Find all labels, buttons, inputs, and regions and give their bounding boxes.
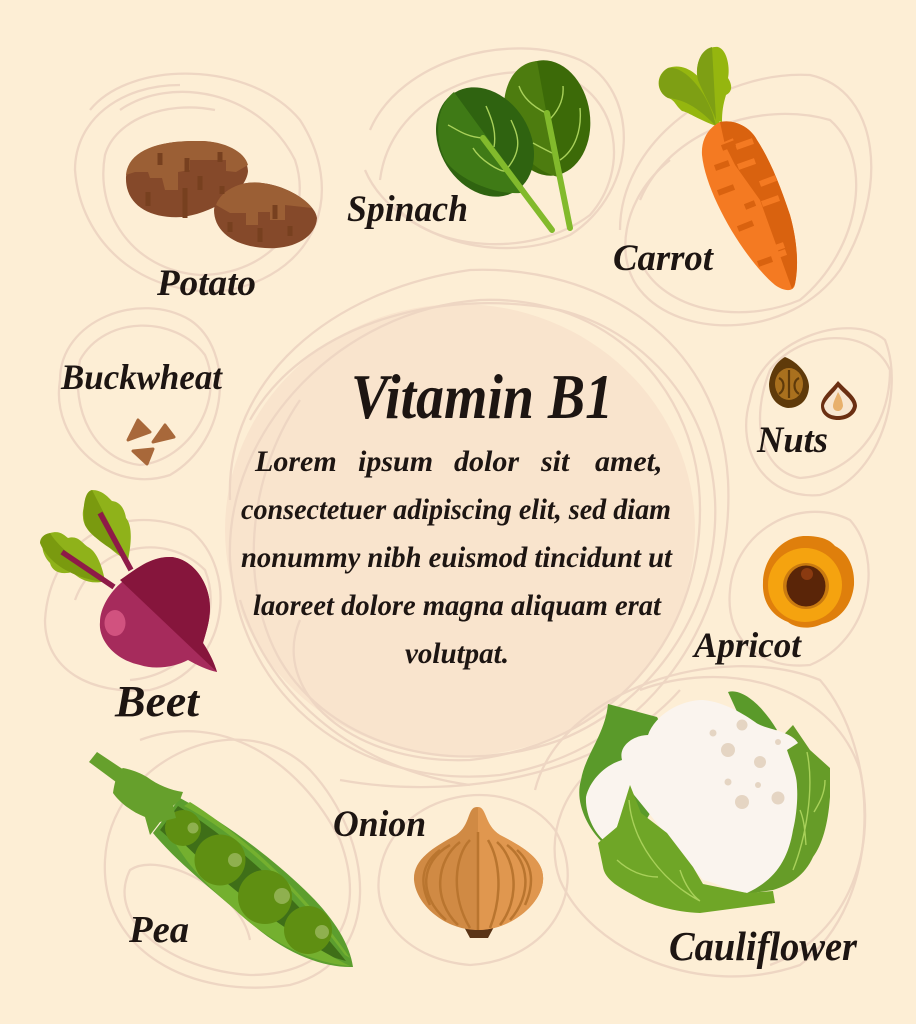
beet illustration: [40, 490, 217, 672]
spinach illustration: [416, 55, 598, 230]
beet label: Beet: [114, 677, 201, 726]
onion illustration: [414, 807, 543, 938]
body text: ipsum: [358, 445, 433, 478]
cauliflower label: Cauliflower: [669, 923, 858, 969]
body text: dolor: [454, 445, 519, 478]
title: Vitamin B1: [351, 361, 613, 432]
apricot label: Apricot: [692, 625, 802, 665]
onion label: Onion: [333, 804, 426, 845]
nuts illustration: [769, 357, 857, 420]
body text: amet,: [595, 445, 662, 478]
apricot illustration: [763, 536, 854, 628]
carrot label: Carrot: [613, 238, 715, 279]
spinach label: Spinach: [347, 189, 468, 230]
pea label: Pea: [128, 909, 189, 951]
buckwheat illustration: [128, 420, 174, 464]
cauliflower illustration: [579, 691, 830, 913]
body text: consectetuer adipiscing elit, sed diam: [241, 493, 671, 526]
buckwheat label: Buckwheat: [60, 357, 223, 397]
potato illustration: [126, 141, 317, 248]
carrot illustration: [659, 47, 797, 290]
pea illustration: [89, 752, 353, 967]
body text: [241, 445, 674, 670]
body text: laoreet dolore magna aliquam erat: [253, 589, 663, 622]
body text: nonummy nibh euismod tincidunt ut: [241, 541, 674, 574]
nuts label: Nuts: [756, 420, 828, 461]
body text: Lorem: [254, 445, 337, 478]
body text: volutpat.: [405, 637, 509, 670]
central circle: [225, 304, 695, 756]
body text: sit: [540, 445, 571, 478]
potato label: Potato: [156, 263, 256, 304]
